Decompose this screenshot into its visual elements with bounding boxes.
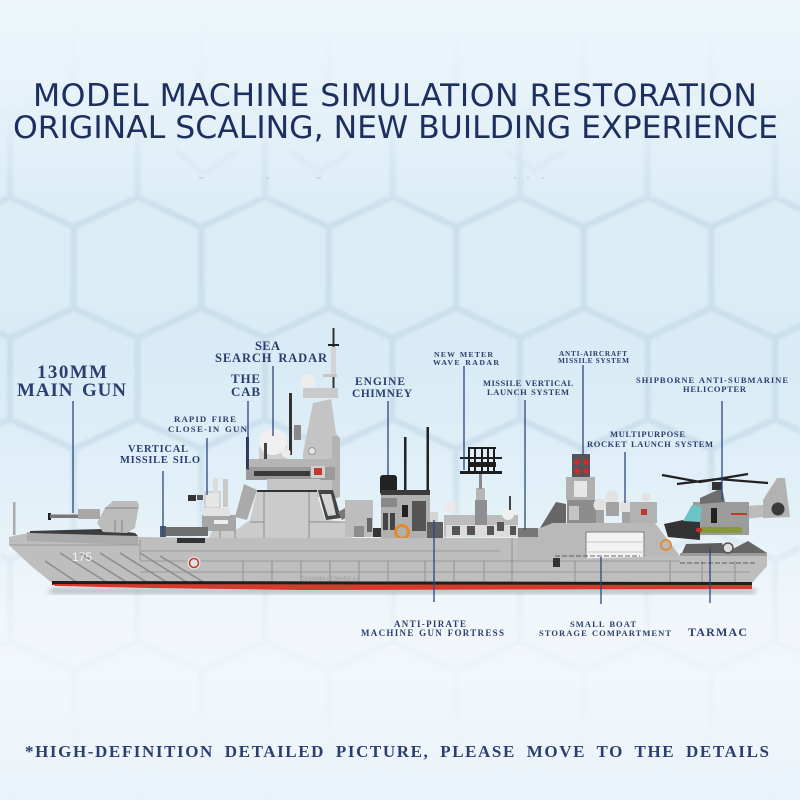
label: rapid fire close-in gun (168, 414, 248, 434)
label: anti-pirate machine gun fortress: ANTI-PIRATE (394, 619, 466, 629)
label: missile vertical launch system: LAUNCH SYSTEM (487, 387, 569, 397)
label: small boat storage compartment (539, 619, 671, 638)
label: rapid fire close-in gun: RAPID FIRE (174, 414, 236, 424)
aft superstructure (518, 454, 680, 570)
main superstructure (202, 490, 381, 543)
helicopter (662, 474, 790, 553)
label: tarmac: TARMAC (688, 625, 747, 639)
title: ORIGINAL SCALING, NEW BUILDING EXPERIENCE (13, 110, 778, 146)
label: engine chimney (352, 376, 413, 400)
title: MODEL MACHINE SIMULATION RESTORATION (33, 78, 757, 114)
label: sea search radar: SEARCH RADAR (215, 351, 328, 365)
leader lines (73, 365, 722, 604)
close-in gun (188, 478, 230, 516)
hull (9, 526, 767, 590)
label: multipurpose rocket launch system (587, 429, 713, 449)
label: 130mm main gun: 130MM (37, 362, 107, 383)
label: engine chimney: CHIMNEY (352, 388, 413, 400)
label: anti-pirate machine gun fortress: MACHINE GUN FORTRESS (361, 628, 504, 638)
label: the cab: THE (231, 371, 260, 386)
label: sea search radar: SEA (255, 339, 280, 353)
label: multipurpose rocket launch system: ROCKET LAUNCH SYSTEM (587, 439, 713, 449)
label: vertical missile silo: VERTICAL (128, 444, 188, 455)
label: sea search radar (215, 339, 328, 365)
label: anti-aircraft missile system: MISSILE SYSTEM (558, 356, 629, 365)
label: new meter wave radar: NEW METER (434, 350, 493, 359)
label: missile vertical launch system (483, 378, 573, 397)
label: shipborne anti-submarine helicopter: SHIPBORNE ANTI-SUBMARINE (636, 375, 788, 385)
label: multipurpose rocket launch system: MULTIPURPOSE (610, 429, 685, 439)
label: small boat storage compartment: STORAGE COMPARTMENT (539, 628, 671, 638)
label: vertical missile silo: MISSILE SILO (120, 455, 200, 466)
hull: CN10040.6239MW.AI (300, 577, 358, 583)
midship deck and radar (427, 447, 518, 540)
label: small boat storage compartment: SMALL BOAT (570, 619, 636, 629)
label: 130mm main gun: MAIN GUN (17, 380, 126, 401)
mast and upper tower (289, 328, 340, 498)
label: the cab: CAB (231, 384, 260, 399)
label: shipborne anti-submarine helicopter: HELICOPTER (683, 384, 747, 394)
label: shipborne anti-submarine helicopter (636, 375, 788, 394)
radar dome and bridge (235, 429, 359, 520)
label: engine chimney: ENGINE (355, 376, 405, 388)
main gun (13, 501, 139, 535)
ship model (9, 328, 790, 590)
label: 130mm main gun (17, 362, 126, 401)
label: the cab (231, 371, 260, 399)
label: rapid fire close-in gun: CLOSE-IN GUN (168, 424, 248, 434)
hull: 175 (72, 550, 92, 564)
label: anti-aircraft missile system: ANTI-AIRCRAFT (559, 349, 627, 358)
title (13, 78, 778, 146)
label: vertical missile silo (120, 444, 200, 466)
label: new meter wave radar: WAVE RADAR (433, 358, 499, 367)
engine chimney and masts (380, 427, 430, 538)
label: missile vertical launch system: MISSILE VERTICAL (483, 378, 573, 388)
label: new meter wave radar (433, 350, 499, 367)
label: anti-pirate machine gun fortress (361, 619, 504, 638)
footer note: *HIGH-DEFINITION DETAILED PICTURE, PLEASE MOVE TO THE DETAILS (25, 742, 769, 761)
label: anti-aircraft missile system (558, 349, 629, 365)
